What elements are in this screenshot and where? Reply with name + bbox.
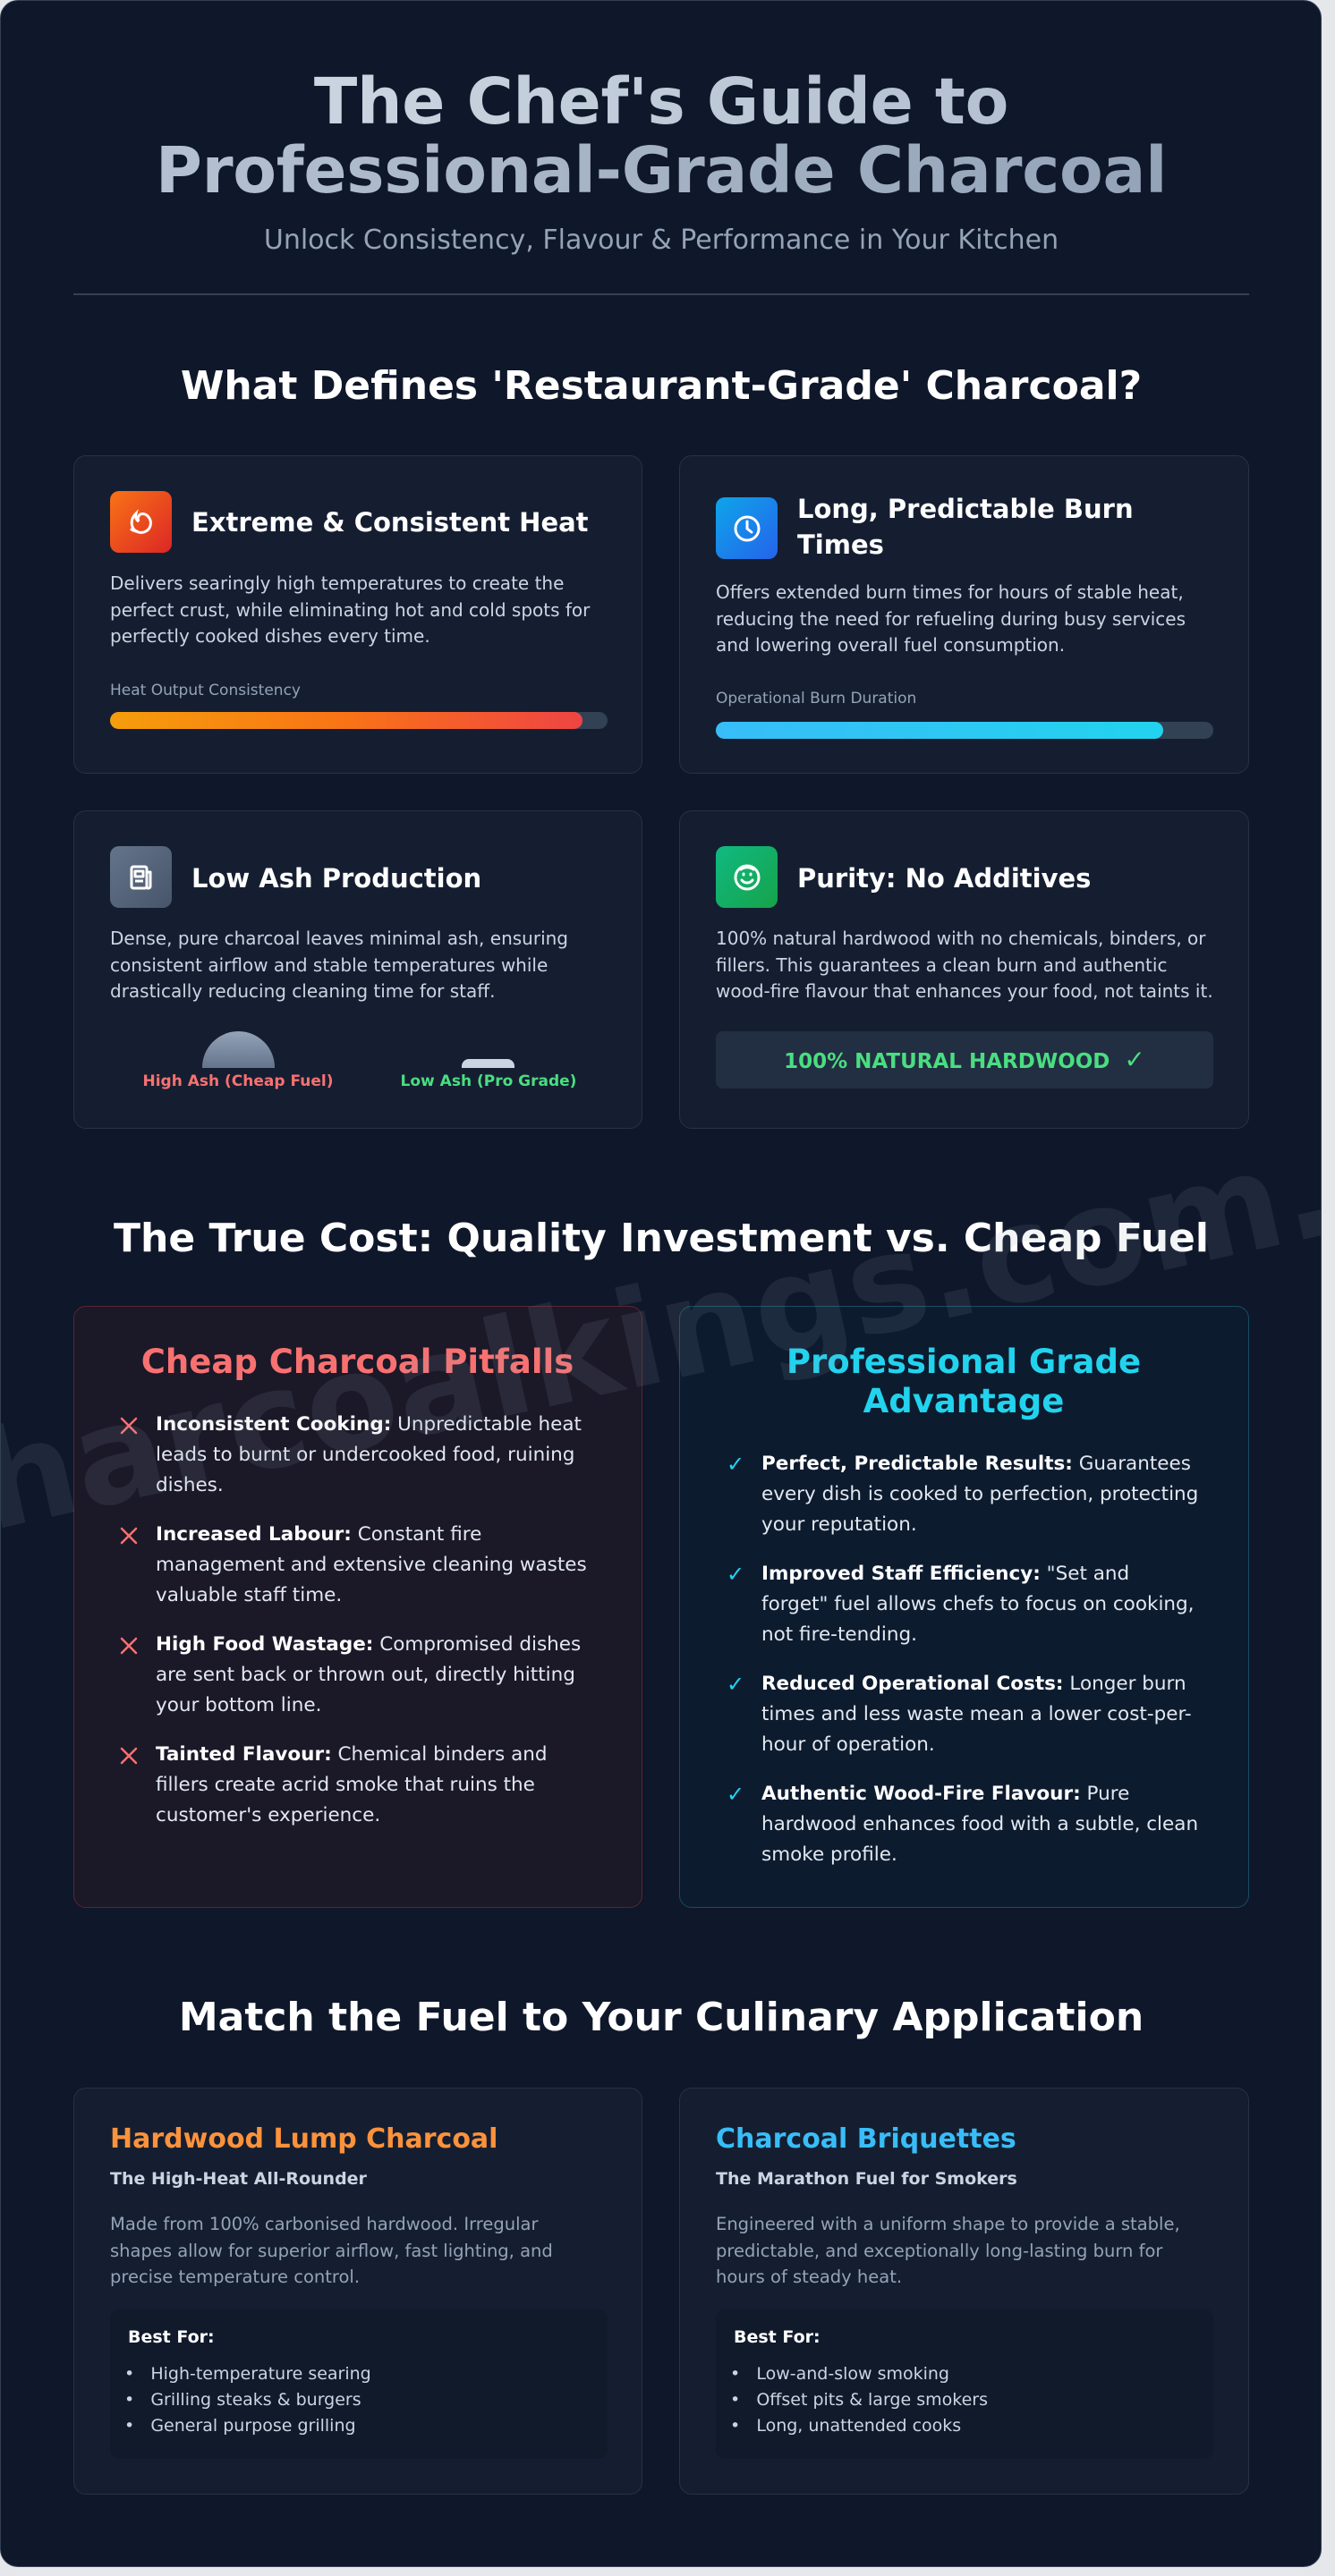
description: and lowering overall fuel consumption. <box>716 634 1065 656</box>
badge: 100% NATURAL HARDWOOD ✓ <box>784 1045 1145 1074</box>
description <box>716 2214 1180 2287</box>
item 3 <box>727 1672 1192 1756</box>
description: Delivers searingly high temperatures to create the <box>110 572 564 594</box>
description: reducing the need for refueling during busy services <box>716 608 1186 630</box>
card: extreme heat <box>73 455 642 774</box>
description: hours of steady heat. <box>716 2267 902 2287</box>
icon: clock <box>716 497 778 559</box>
description: Offers extended burn times for hours of stable heat, <box>716 581 1184 603</box>
item 3: times and less waste mean a lower cost-per- <box>761 1703 1192 1725</box>
heading: Extreme & Consistent Heat <box>191 507 589 538</box>
item 3: Reduced Operational Costs: Longer burn <box>761 1673 1186 1695</box>
item 3: your bottom line. <box>156 1694 321 1716</box>
best for box: • Long, unattended cooks <box>730 2416 961 2436</box>
description: perfectly cooked dishes every time. <box>110 625 430 647</box>
chart: ash comparison: Low Ash (Pro Grade) <box>401 1072 576 1090</box>
panel title: Advantage <box>863 1382 1064 1420</box>
item 2 <box>727 1562 1195 1646</box>
item 3: ✓ <box>727 1672 744 1697</box>
card title: Charcoal Briquettes <box>716 2123 1016 2155</box>
card: burn times <box>679 455 1249 774</box>
panel title <box>787 1343 1141 1420</box>
bar label: Operational Burn Duration <box>716 690 916 708</box>
chart: ash comparison: High Ash (Cheap Fuel) <box>143 1072 333 1090</box>
item 1: Inconsistent Cooking: Unpredictable heat <box>156 1413 582 1436</box>
item 4: smoke profile. <box>761 1843 897 1866</box>
description: shapes allow for superior airflow, fast lighting, and <box>110 2240 553 2261</box>
item 1 <box>727 1452 1198 1536</box>
description <box>110 572 591 647</box>
item 3: hour of operation. <box>761 1733 935 1756</box>
title: Professional-Grade Charcoal <box>156 133 1167 208</box>
panel: pro advantage <box>679 1306 1249 1908</box>
best for box: • Offset pits & large smokers <box>730 2390 988 2410</box>
bar label: Heat Output Consistency <box>110 682 301 699</box>
description: Engineered with a uniform shape to provide a stable, <box>716 2214 1180 2234</box>
best for box: Best For: <box>734 2327 821 2347</box>
subtitle: The High-Heat All-Rounder <box>110 2169 367 2189</box>
item 4: Authentic Wood-Fire Flavour: Pure <box>761 1783 1129 1805</box>
heading: Long, Predictable Burn <box>797 494 1134 524</box>
item 3: High Food Wastage: Compromised dishes <box>156 1633 581 1656</box>
heading: match fuel: Match the Fuel to Your Culinary Application <box>179 1995 1144 2040</box>
description: predictable, and exceptionally long-lasting burn for <box>716 2240 1162 2261</box>
item 3 <box>120 1633 581 1716</box>
item 4 <box>120 1743 548 1826</box>
panel title: Cheap Charcoal Pitfalls <box>141 1343 574 1381</box>
bar: burn <box>716 722 1213 739</box>
item 2: not fire-tending. <box>761 1623 917 1646</box>
description: fillers. This guarantees a clean burn and authentic <box>716 953 1167 975</box>
title <box>156 64 1167 208</box>
item 2: Increased Labour: Constant fire <box>156 1523 481 1546</box>
item 4: fillers create acrid smoke that ruins the <box>156 1774 535 1796</box>
best for box: • Grilling steaks & burgers <box>124 2390 361 2410</box>
item 2 <box>120 1523 587 1606</box>
title: The Chef's Guide to <box>314 64 1008 139</box>
best for box <box>110 2309 608 2459</box>
chart: ash comparison <box>143 1031 576 1090</box>
icon: smiley <box>716 846 778 908</box>
description: consistent airflow and stable temperatures while <box>110 953 548 975</box>
item 4: Tainted Flavour: Chemical binders and <box>156 1743 548 1766</box>
subtitle: The Marathon Fuel for Smokers <box>716 2169 1017 2189</box>
description <box>110 2214 553 2287</box>
item 4: hardwood enhances food with a subtle, clean <box>761 1813 1198 1835</box>
card: purity <box>679 810 1249 1129</box>
description <box>716 581 1186 656</box>
item 1: ✓ <box>727 1452 744 1477</box>
bar: heat <box>110 712 608 729</box>
card title: Hardwood Lump Charcoal <box>110 2123 497 2155</box>
description: perfect crust, while eliminating hot and cold spots for <box>110 599 590 621</box>
heading: Times <box>797 530 884 560</box>
card: low ash <box>73 810 642 1129</box>
heading: what defines: What Defines 'Restaurant-Grade' Charcoal? <box>181 363 1142 409</box>
item 1 <box>120 1413 582 1496</box>
item 1: Perfect, Predictable Results: Guarantees <box>761 1453 1191 1475</box>
panel: cheap pitfalls <box>73 1306 642 1908</box>
description: precise temperature control. <box>110 2267 360 2287</box>
item 1: every dish is cooked to perfection, protecting <box>761 1483 1198 1505</box>
item 2: valuable staff time. <box>156 1584 342 1606</box>
item 3: are sent back or thrown out, directly hitting <box>156 1664 575 1686</box>
heading: Low Ash Production <box>191 863 481 894</box>
best for box: Best For: <box>128 2327 215 2347</box>
best for box <box>716 2309 1213 2459</box>
subtitle: Unlock Consistency, Flavour & Performance in Your Kitchen <box>264 225 1059 256</box>
item 4: customer's experience. <box>156 1804 380 1826</box>
item 1: dishes. <box>156 1474 224 1496</box>
heading <box>797 494 1134 560</box>
icon: document <box>110 846 172 908</box>
item 1: your reputation. <box>761 1513 917 1536</box>
card: briquettes <box>679 2088 1249 2495</box>
best for box: • General purpose grilling <box>124 2416 356 2436</box>
item 2: management and extensive cleaning wastes <box>156 1554 587 1576</box>
item 1: leads to burnt or undercooked food, ruining <box>156 1444 574 1466</box>
icon: flame <box>110 491 172 553</box>
description: 100% natural hardwood with no chemicals, binders, or <box>716 928 1206 949</box>
description <box>716 928 1213 1002</box>
description: Made from 100% carbonised hardwood. Irregular <box>110 2214 538 2234</box>
best for box: • High-temperature searing <box>124 2364 371 2384</box>
badge <box>716 1031 1213 1089</box>
card: lump charcoal <box>73 2088 642 2495</box>
description: drastically reducing cleaning time for staff. <box>110 980 495 1002</box>
heading: Purity: No Additives <box>797 863 1091 894</box>
item 4 <box>727 1782 1198 1866</box>
item 2: forget" fuel allows chefs to focus on cooking, <box>761 1593 1195 1615</box>
heading: true cost: The True Cost: Quality Investment vs. Cheap Fuel <box>114 1216 1209 1261</box>
panel title: Professional Grade <box>787 1343 1141 1381</box>
item 2: Improved Staff Efficiency: "Set and <box>761 1563 1129 1585</box>
description <box>110 928 568 1002</box>
item 4: ✓ <box>727 1782 744 1807</box>
description: Dense, pure charcoal leaves minimal ash, ensuring <box>110 928 568 949</box>
item 2: ✓ <box>727 1562 744 1587</box>
best for box: • Low-and-slow smoking <box>730 2364 949 2384</box>
description: wood-fire flavour that enhances your food, not taints it. <box>716 980 1213 1002</box>
